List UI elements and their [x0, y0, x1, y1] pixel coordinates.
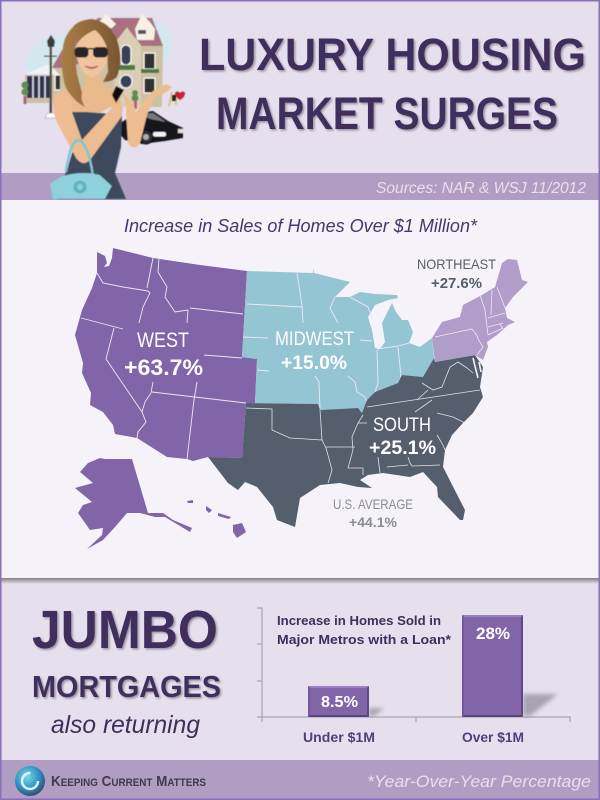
icon: cloud behind house [25, 20, 173, 80]
icon: phone [112, 86, 124, 103]
x-axis labels: Under $1M [303, 730, 375, 745]
title: MARKET SURGES [216, 88, 558, 139]
heading: jumbo mortgages: also returning [51, 711, 200, 739]
x-axis labels: Over $1M [462, 730, 524, 745]
icon: black car [117, 111, 183, 144]
label: U.S. average: +44.1% [349, 514, 398, 530]
heading: jumbo mortgages [32, 600, 221, 739]
panel: header [0, 0, 600, 200]
label: Midwest: MIDWEST [275, 329, 354, 350]
label: Midwest: +15.0% [281, 353, 347, 374]
bar: over $1M [462, 615, 523, 717]
chart title [277, 613, 452, 647]
brand name: Keeping Current Matters [51, 773, 206, 790]
panel: bottom section [0, 578, 600, 800]
title: LUXURY HOUSING [199, 29, 586, 80]
footnote: *Year-Over-Year Percentage [367, 772, 591, 791]
label: Northeast [417, 256, 496, 292]
icon: Keeping Current Matters logo [15, 766, 45, 796]
illustration: house, car and woman [22, 14, 185, 199]
label: U.S. average: U.S. AVERAGE [333, 496, 413, 512]
woman: right arm [120, 84, 172, 148]
woman: smile [85, 66, 98, 68]
label: South [369, 415, 436, 459]
sources note: Sources: NAR & WSJ 11/2012 [376, 180, 586, 197]
label: U.S. average [333, 496, 413, 530]
woman: dress [57, 112, 126, 199]
label: South: SOUTH [373, 415, 431, 436]
title [199, 29, 586, 139]
bar shadows [369, 694, 558, 716]
label: West: WEST [137, 329, 189, 352]
icon: sunglasses [74, 47, 108, 58]
chart axes [257, 608, 570, 722]
region: West [75, 248, 257, 549]
bar chart [257, 608, 570, 745]
label: Midwest [275, 329, 354, 374]
x-axis labels [303, 730, 524, 745]
label: West [124, 329, 203, 380]
label: Northeast: +27.6% [431, 276, 482, 292]
heading: jumbo mortgages: MORTGAGES [32, 669, 221, 704]
icon: house [22, 14, 163, 109]
chart title: Increase in Homes Sold in [277, 613, 441, 628]
region: South [208, 355, 483, 527]
label: South: +25.1% [369, 438, 436, 459]
woman: neck and chest [72, 76, 122, 113]
woman: left arm [53, 88, 123, 163]
woman: hair [61, 19, 121, 107]
region: Midwest [242, 268, 434, 413]
heading: jumbo mortgages: JUMBO [32, 600, 218, 660]
icon: street lamp [44, 35, 57, 118]
icon: blue handbag [50, 140, 112, 199]
bar: under $1M: 8.5% [321, 694, 358, 711]
label: West: +63.7% [124, 355, 203, 380]
map of the United States [75, 248, 528, 549]
region: Northeast [432, 259, 528, 362]
chart title: Major Metros with a Loan* [277, 632, 452, 647]
icon: keys and heart keychain [169, 92, 185, 106]
woman: face [75, 30, 108, 78]
bar: under $1M [308, 686, 369, 717]
label: Northeast: NORTHEAST [417, 256, 496, 272]
bar: over $1M: 28% [476, 624, 510, 643]
map heading: Increase in Sales of Homes Over $1 Million* [124, 216, 478, 236]
